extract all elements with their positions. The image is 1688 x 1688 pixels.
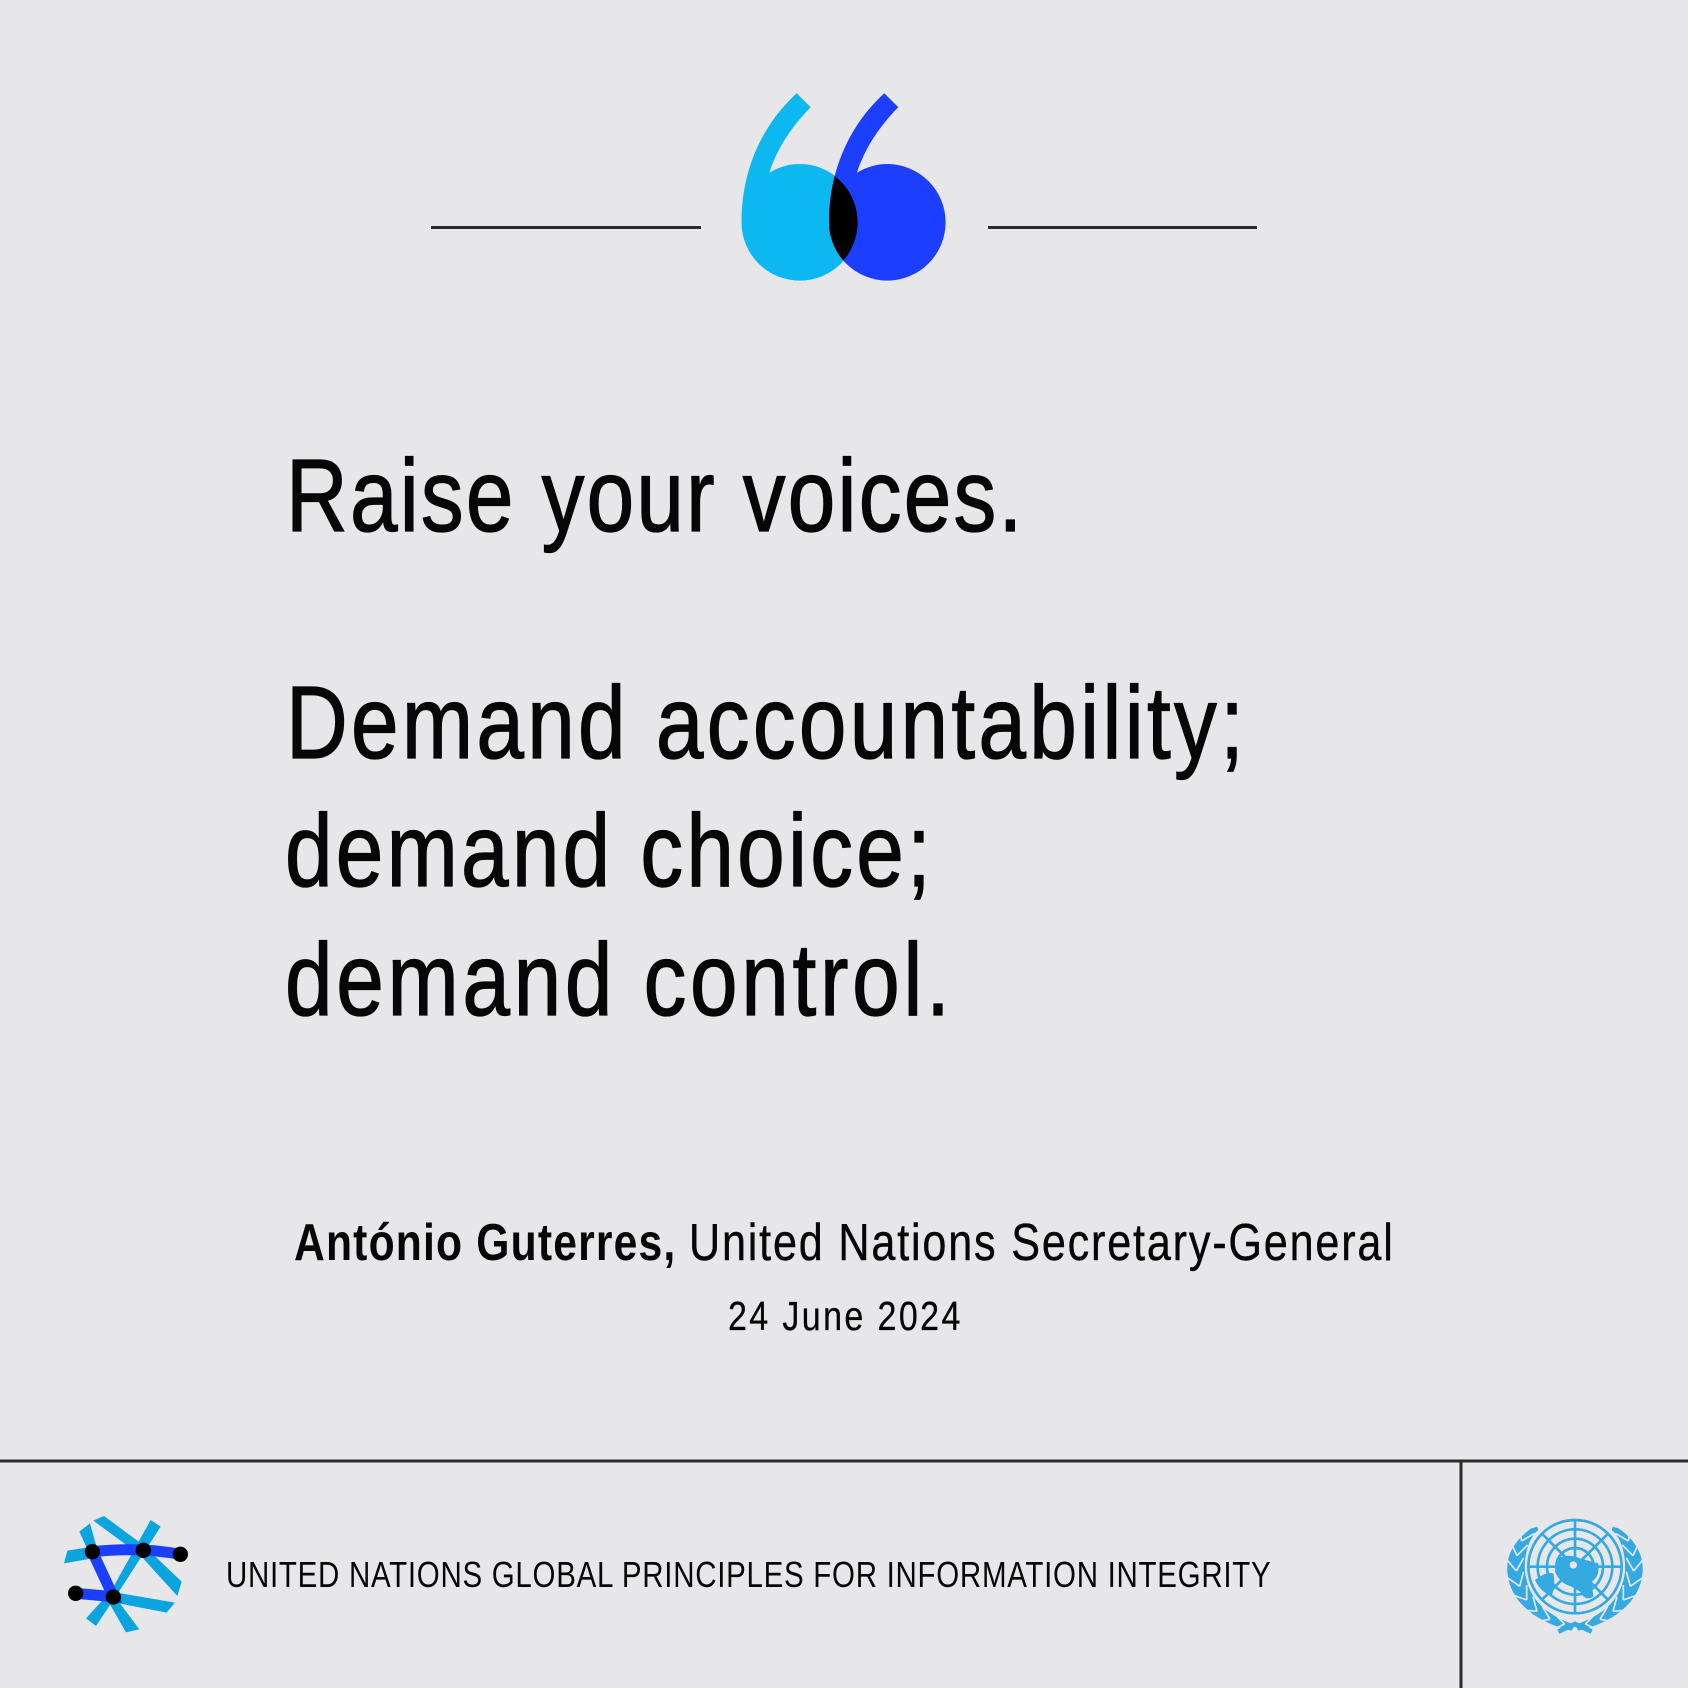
quote: demand lines: demand control. — [285, 923, 950, 1038]
date: 24 June 2024 — [728, 1293, 960, 1339]
footer text: UNITED NATIONS GLOBAL PRINCIPLES FOR INFORMATION INTEGRITY — [226, 1554, 1271, 1595]
quote: demand lines: Demand accountability; — [286, 666, 1244, 781]
icon: quotation mark — [742, 93, 946, 281]
quote: raise your voices: Raise your voices. — [286, 439, 1022, 554]
quote: demand lines — [285, 666, 1244, 1038]
attribution: António Guterres, — [294, 1214, 675, 1272]
quote: demand lines: demand choice; — [285, 794, 931, 909]
attribution: United Nations Secretary-General — [689, 1214, 1393, 1272]
icon: United Nations emblem — [1507, 1513, 1643, 1632]
attribution — [294, 1214, 1393, 1272]
icon: global principles logo — [64, 1516, 188, 1632]
